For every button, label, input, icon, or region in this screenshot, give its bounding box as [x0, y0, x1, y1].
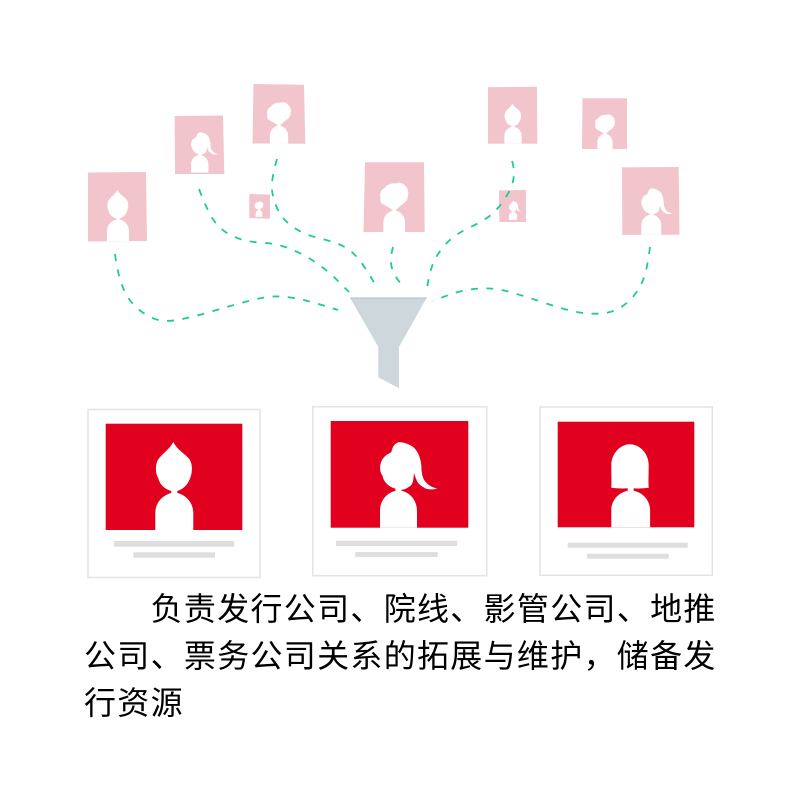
portrait card: tiny right [499, 190, 526, 222]
description text: 行资源 [84, 685, 184, 721]
dashed connectors into funnel [115, 159, 650, 321]
portrait card: centre curly hair [364, 162, 425, 232]
result card: centre ponytail [313, 407, 487, 576]
portrait card: small left pointy hair [88, 172, 147, 242]
portrait card: ponytail [175, 116, 224, 174]
portrait card: pointy hair top right [488, 87, 537, 144]
portrait card: curly hair top [252, 84, 305, 144]
description text [84, 591, 717, 721]
portrait card: curly hair right [582, 98, 627, 149]
funnel [350, 298, 427, 388]
portrait card: tiny left [249, 194, 270, 219]
description text: 负责发行公司、院线、影管公司、地推 [151, 591, 717, 627]
result card: left pointy hair [88, 410, 260, 578]
portrait card: ponytail far right [622, 167, 680, 235]
result card: right bob hair [540, 407, 712, 575]
description text: 公司、票务公司关系的拓展与维护，储备发 [84, 638, 717, 674]
